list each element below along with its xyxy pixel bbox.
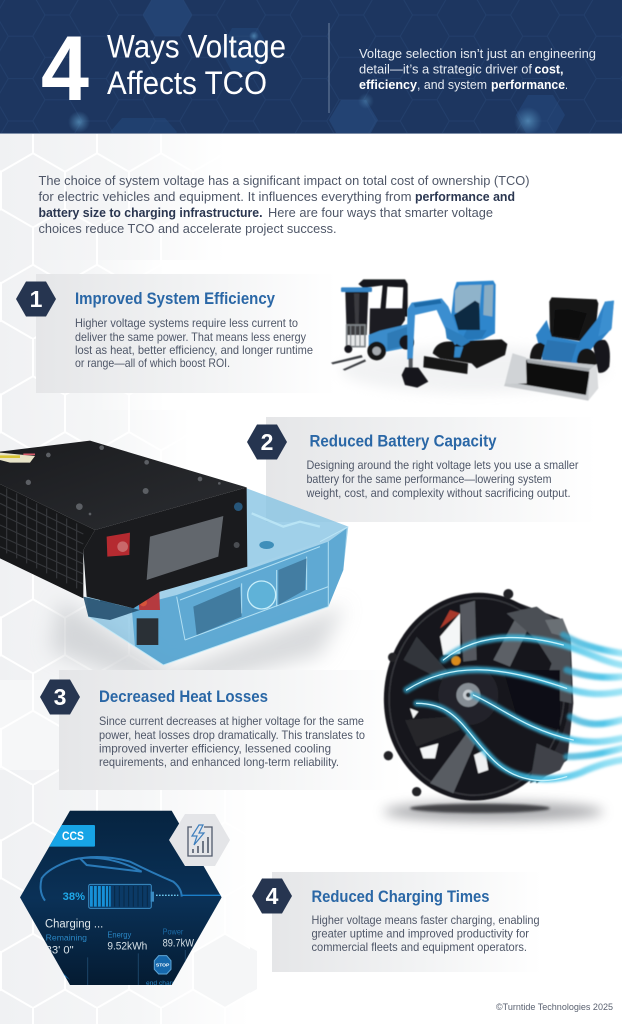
number hexagon 3	[40, 680, 80, 714]
fan body	[374, 584, 580, 810]
image: EV charging screen hexagon: 33' 0"	[46, 945, 74, 957]
heading 1: Improved System Efficiency	[75, 290, 276, 308]
image: battery pack, half solid and half x-ray	[0, 441, 348, 665]
big number 4: 4	[41, 18, 89, 120]
panel 4: reduced charging times	[252, 872, 542, 972]
image: EV charging screen hexagon	[17, 807, 227, 990]
header summary text: Voltage selection isn’t just an engineering	[359, 46, 596, 61]
heading 4: Reduced Charging Times	[312, 888, 490, 906]
image: EV charging screen hexagon: 9.52kWh	[107, 941, 147, 953]
body 4: commercial fleets and equipment operators.	[312, 940, 527, 954]
title: Ways Voltage	[107, 28, 286, 64]
body 1	[75, 316, 313, 370]
body 4	[312, 913, 540, 954]
number hexagon 1: 1	[30, 286, 43, 312]
divider	[328, 23, 330, 113]
body 2: weight, cost, and complexity without sacrificing output.	[306, 486, 570, 500]
intro paragraph: choices reduce TCO and accelerate project success.	[38, 221, 336, 236]
battery gauge	[63, 884, 222, 908]
panel 3: decreased heat losses	[40, 670, 404, 790]
header banner	[0, 0, 622, 134]
body 4: Higher voltage means faster charging, enabling	[312, 913, 540, 927]
mini excavator	[402, 281, 507, 388]
stop button	[154, 956, 171, 974]
body 1: or range—all of which boost ROI.	[75, 356, 230, 370]
body 3	[99, 714, 365, 769]
body 3: improved inverter efficiency, lessened cooling	[99, 742, 331, 756]
image: electric forklift, excavator and skid steer	[331, 279, 614, 401]
heading 2: Reduced Battery Capacity	[310, 432, 497, 450]
body 4: greater uptime and improved productivity for	[312, 926, 529, 940]
car outline	[41, 857, 182, 901]
body 1: lost as heat, better efficiency, and longer runtime	[75, 343, 313, 357]
body 3: requirements, and enhanced long-term reliability.	[99, 755, 339, 769]
intro paragraph	[38, 173, 530, 236]
header summary text	[359, 46, 596, 92]
body 3: power, heat losses drop dramatically. This translates to	[99, 728, 365, 742]
intro paragraph: performance and	[415, 189, 515, 204]
image: EV charging screen hexagon: 89.7kW	[163, 937, 195, 949]
number hexagon 3: 3	[54, 684, 66, 710]
copyright: ©Turntide Technologies 2025	[496, 1002, 613, 1013]
header summary text: performance	[491, 77, 565, 92]
header summary text: , and system	[417, 77, 487, 92]
airflow streams	[407, 635, 622, 780]
intro paragraph: battery size to charging infrastructure.	[38, 205, 262, 220]
icon: voltage chart in hexagon	[169, 814, 230, 866]
image: EV charging screen hexagon: end charging	[146, 980, 185, 987]
number hexagon 4	[252, 878, 292, 914]
panel 2: reduced battery capacity	[247, 417, 596, 522]
CCS label: CCS	[62, 829, 84, 843]
image: EV charging screen hexagon: Remaining	[46, 933, 87, 943]
heading 3: Decreased Heat Losses	[99, 688, 268, 706]
battery gauge: 38%	[63, 891, 86, 903]
intro paragraph: The choice of system voltage has a significant impact on total cost of ownership (TCO)	[38, 173, 530, 188]
number hexagon 4: 4	[266, 883, 279, 909]
image: shadow under battery	[50, 600, 345, 695]
number hexagon 2	[247, 424, 287, 460]
header summary text: efficiency	[359, 77, 418, 92]
stop button: STOP	[156, 963, 170, 969]
skid steer	[504, 297, 614, 401]
x-ray half	[83, 488, 348, 665]
body 2	[306, 458, 578, 500]
title	[107, 34, 285, 94]
solid black half	[0, 441, 247, 620]
number hexagon 2: 2	[261, 429, 273, 455]
body 2: battery for the same performance—lowering system	[306, 472, 552, 486]
title: Affects TCO	[107, 65, 267, 101]
body 3: Since current decreases at higher voltage for the same	[99, 714, 364, 728]
image: cooling fan with airflow	[374, 584, 622, 821]
image: EV charging screen hexagon: Charging ...	[45, 917, 103, 931]
body 2: Designing around the right voltage lets you use a smaller	[306, 458, 578, 472]
CCS label	[49, 825, 95, 847]
body 1: Higher voltage systems require less current to	[75, 316, 298, 330]
body 1: deliver the same power. That means less energy	[75, 330, 306, 344]
intro paragraph: Here are four ways that smarter voltage	[268, 205, 493, 220]
fan shadow	[383, 802, 603, 821]
header summary text: detail—it’s a strategic driver of	[359, 62, 532, 76]
image: EV charging screen hexagon: Power	[163, 927, 184, 936]
header summary text: cost,	[534, 62, 564, 76]
number hexagon 1	[16, 282, 56, 316]
forklift	[331, 279, 414, 371]
image: EV charging screen hexagon: Energy	[107, 929, 132, 939]
intro paragraph: for electric vehicles and equipment. It influences everything from	[38, 189, 412, 204]
header summary text: .	[565, 77, 568, 92]
panel 1: improved system efficiency	[16, 274, 336, 393]
